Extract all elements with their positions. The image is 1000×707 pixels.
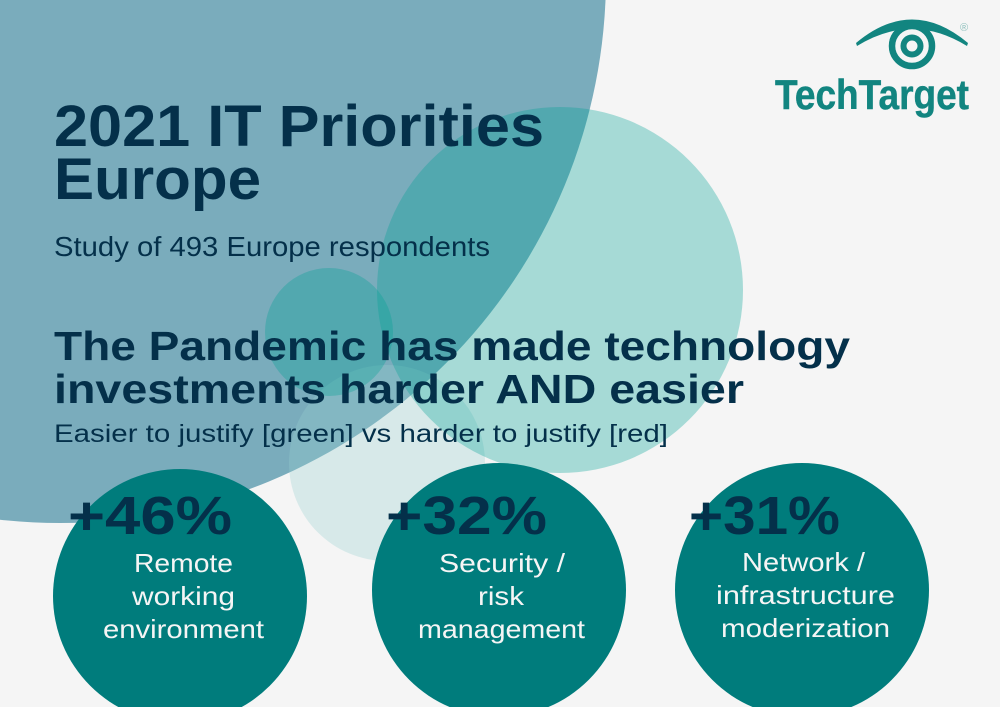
background: pale circle <box>289 365 485 561</box>
label: management <box>418 614 586 644</box>
label: risk <box>478 581 525 611</box>
label: Network / <box>742 547 866 577</box>
label: Remote <box>134 548 233 578</box>
title: Europe <box>54 147 261 212</box>
subtitle: Study of 493 Europe respondents <box>54 231 490 262</box>
label: infrastructure <box>716 580 895 610</box>
logo: TechTarget <box>775 20 969 118</box>
title: 2021 IT Priorities <box>54 94 544 159</box>
background: large teal circle <box>377 107 743 473</box>
background: small teal circle <box>265 268 393 396</box>
value: +31% <box>689 486 840 546</box>
label: Security / <box>439 548 566 578</box>
heading: pandemic: The Pandemic has made technology <box>54 323 850 369</box>
heading: pandemic: investments harder AND easier <box>54 366 744 412</box>
label: working <box>131 581 235 611</box>
background: large blue circle <box>0 0 606 523</box>
value: +32% <box>386 486 547 546</box>
value: +46% <box>68 486 232 546</box>
legend note: Easier to justify [green] vs harder to justify [red] <box>54 420 668 448</box>
label: moderization <box>721 613 890 643</box>
icon: eye <box>856 20 968 66</box>
stat: network <box>675 463 929 707</box>
label: environment <box>103 614 265 644</box>
logo wordmark: TechTarget <box>775 71 969 118</box>
stat: security <box>372 463 626 707</box>
stat: remote working <box>53 469 307 707</box>
registered mark: ® <box>960 22 968 34</box>
